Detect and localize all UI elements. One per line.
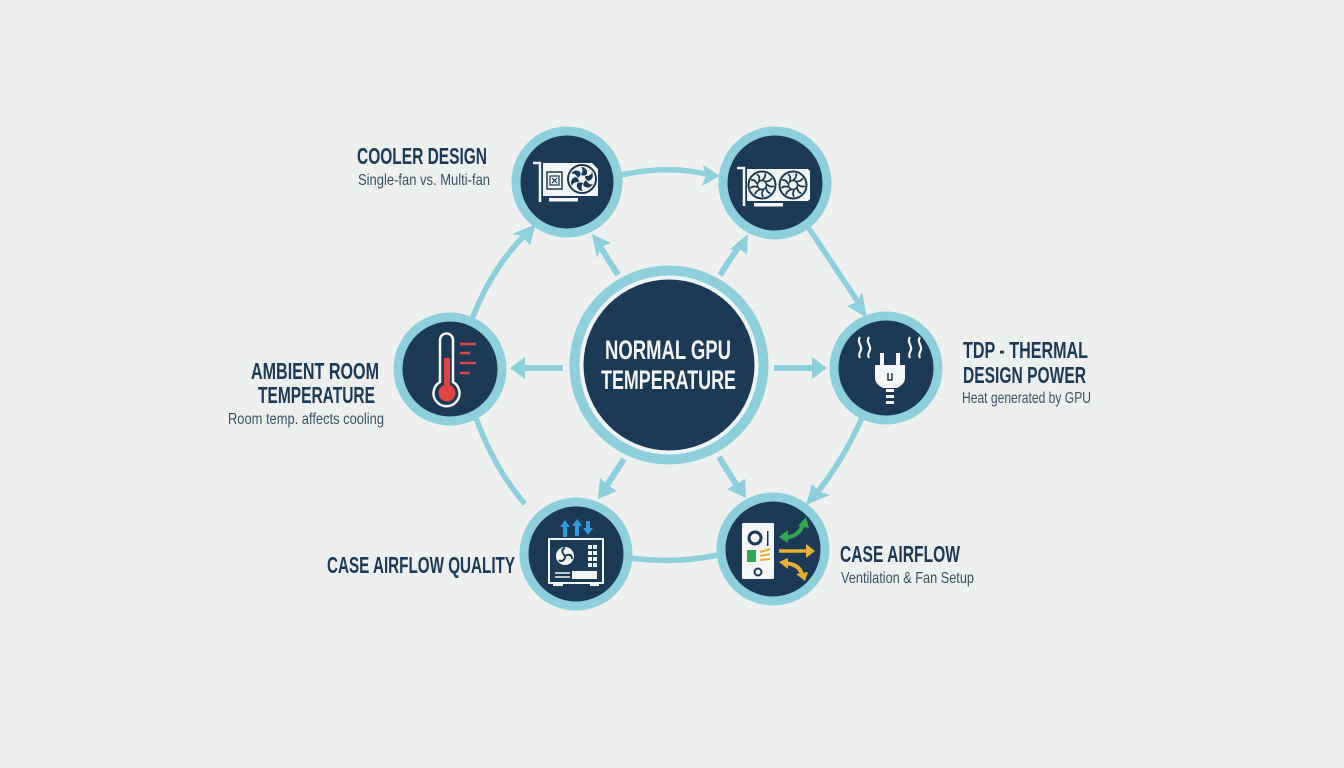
label: case airflow: Ventilation & Fan Setup (841, 570, 974, 587)
node: case airflow quality (327, 502, 628, 606)
label: TDP: Heat generated by GPU (962, 390, 1091, 407)
icon: single-fan graphics card (533, 163, 598, 202)
icon: hot power plug (859, 337, 921, 404)
label: ambient room temperature (228, 358, 384, 428)
centre hub (574, 270, 764, 460)
icon: thermometer (434, 334, 476, 406)
label: TDP: TDP - THERMAL (963, 337, 1088, 363)
label: cooler design: Single-fan vs. Multi-fan (358, 172, 490, 189)
label: cooler design (357, 143, 490, 189)
node: case airflow (721, 497, 974, 601)
label: case airflow quality: CASE AIRFLOW QUALITY (327, 552, 515, 578)
icon: PC case with fan and blue arrows (549, 519, 603, 586)
node: cooler design (357, 131, 618, 233)
label: case airflow: CASE AIRFLOW (840, 541, 960, 567)
outer cycle arrows (472, 165, 867, 560)
label: ambient room temperature: AMBIENT ROOM (251, 358, 379, 384)
label: ambient room temperature: TEMPERATURE (258, 382, 375, 408)
node: dual-fan card (723, 131, 827, 235)
centre title: TEMPERATURE (601, 365, 736, 395)
spoke arrows from centre (510, 234, 827, 499)
label: ambient room temperature: Room temp. affects cooling (228, 411, 384, 428)
centre title: NORMAL GPU (605, 335, 731, 365)
icon: dual-fan graphics card (737, 168, 810, 206)
node: ambient room temperature (228, 317, 502, 428)
label: TDP (962, 337, 1091, 407)
centre title (601, 335, 736, 395)
icon: case with airflow arrows (742, 517, 815, 581)
label: cooler design: COOLER DESIGN (357, 143, 487, 169)
node: TDP (834, 316, 1091, 420)
label: TDP: DESIGN POWER (963, 362, 1086, 388)
label: case airflow (840, 541, 974, 587)
